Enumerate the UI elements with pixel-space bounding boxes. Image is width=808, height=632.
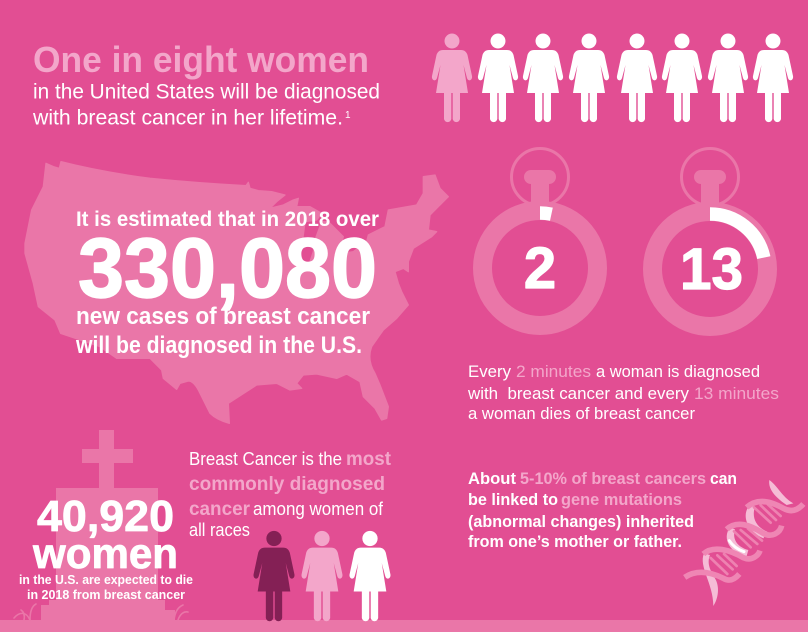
stat: women: women — [32, 530, 178, 578]
text: commonly diagnosed: commonly diagnosed — [189, 474, 385, 495]
text: every: Every — [468, 362, 511, 381]
text: cancer: cancer — [189, 499, 251, 520]
panel: 40,920 women — [19, 492, 193, 602]
icon: woman 3 — [523, 34, 563, 122]
icon: woman 8 — [753, 34, 793, 122]
text: be linked to: be linked to — [468, 490, 558, 509]
panel: one in eight headline — [32, 39, 380, 130]
icon: woman 2 — [478, 34, 518, 122]
text: a woman dies: a woman dies of breast cancer — [468, 404, 695, 423]
icon: stopwatch 13 minutes: 13 — [680, 237, 743, 302]
icon: three women of different races — [254, 531, 390, 621]
icon: dark woman — [254, 531, 294, 621]
grass right — [174, 605, 188, 620]
icon: highlighted woman — [432, 34, 472, 122]
icon: woman 7 — [708, 34, 748, 122]
icon: stopwatch 2 minutes: 2 — [524, 236, 556, 301]
text: 5-10% of breast cancers: 5-10% of breast cancers — [520, 469, 706, 488]
icon: gravestone with cross — [14, 430, 188, 620]
icon: woman 4 — [569, 34, 609, 122]
text: mother or father: from one’s mother or father. — [468, 532, 682, 551]
icon: woman 6 — [662, 34, 702, 122]
icon: white woman — [350, 531, 390, 621]
text: abnormal changes: (abnormal changes) inherited — [468, 512, 694, 531]
text: among women of: among women of — [253, 499, 384, 519]
text: can: can — [710, 469, 737, 488]
icon: woman 5 — [617, 34, 657, 122]
text: united states line: in the United States will be diagnosed — [33, 80, 380, 104]
text: will be diagnosed: will be diagnosed in the U.S. — [75, 332, 362, 359]
text: breast cancer is the: Breast Cancer is the — [189, 449, 342, 469]
text: new cases: new cases of breast cancer — [76, 303, 370, 330]
text: lifetime line: with breast cancer in her lifetime. — [32, 106, 343, 130]
icon: stopwatch 13 minutes — [652, 148, 768, 326]
text: in 2018: in 2018 from breast cancer — [27, 587, 185, 602]
text: a woman is diagnosed: a woman is diagnosed — [596, 362, 760, 381]
text: estimate intro: It is estimated that in 2018 over — [76, 208, 379, 231]
panel: 330,080 new cases — [75, 208, 379, 359]
text: most: most — [346, 449, 392, 470]
panel: every 2 and 13 minutes text — [467, 362, 779, 423]
grass left — [14, 604, 36, 620]
text: gene mutations: gene mutations — [561, 490, 682, 509]
panel: gene mutations text — [468, 469, 737, 551]
ground band — [0, 620, 808, 632]
pictogram: eight women, one highlighted — [432, 34, 793, 122]
icon: DNA helix — [685, 480, 803, 606]
map: United States silhouette — [25, 162, 448, 423]
panel: most commonly diagnosed text — [189, 449, 392, 540]
text: about: About — [468, 469, 516, 488]
stat: 40,920: 40,920 — [37, 492, 174, 541]
footnote marker: 1 — [345, 110, 351, 121]
text: expected to die: in the U.S. are expected to die — [19, 572, 193, 587]
stat: 330,080: 330,080 — [78, 221, 377, 315]
text: all races: all races — [189, 520, 250, 540]
text: with breast cancer: with breast cancer and every — [467, 384, 689, 403]
text: 13 minutes: 13 minutes — [694, 384, 779, 403]
text: 2 minutes: 2 minutes — [516, 362, 591, 381]
icon: pale woman — [302, 531, 342, 621]
icon: stopwatch 2 minutes — [482, 148, 598, 326]
heading: one in eight women: One in eight women — [33, 39, 369, 80]
